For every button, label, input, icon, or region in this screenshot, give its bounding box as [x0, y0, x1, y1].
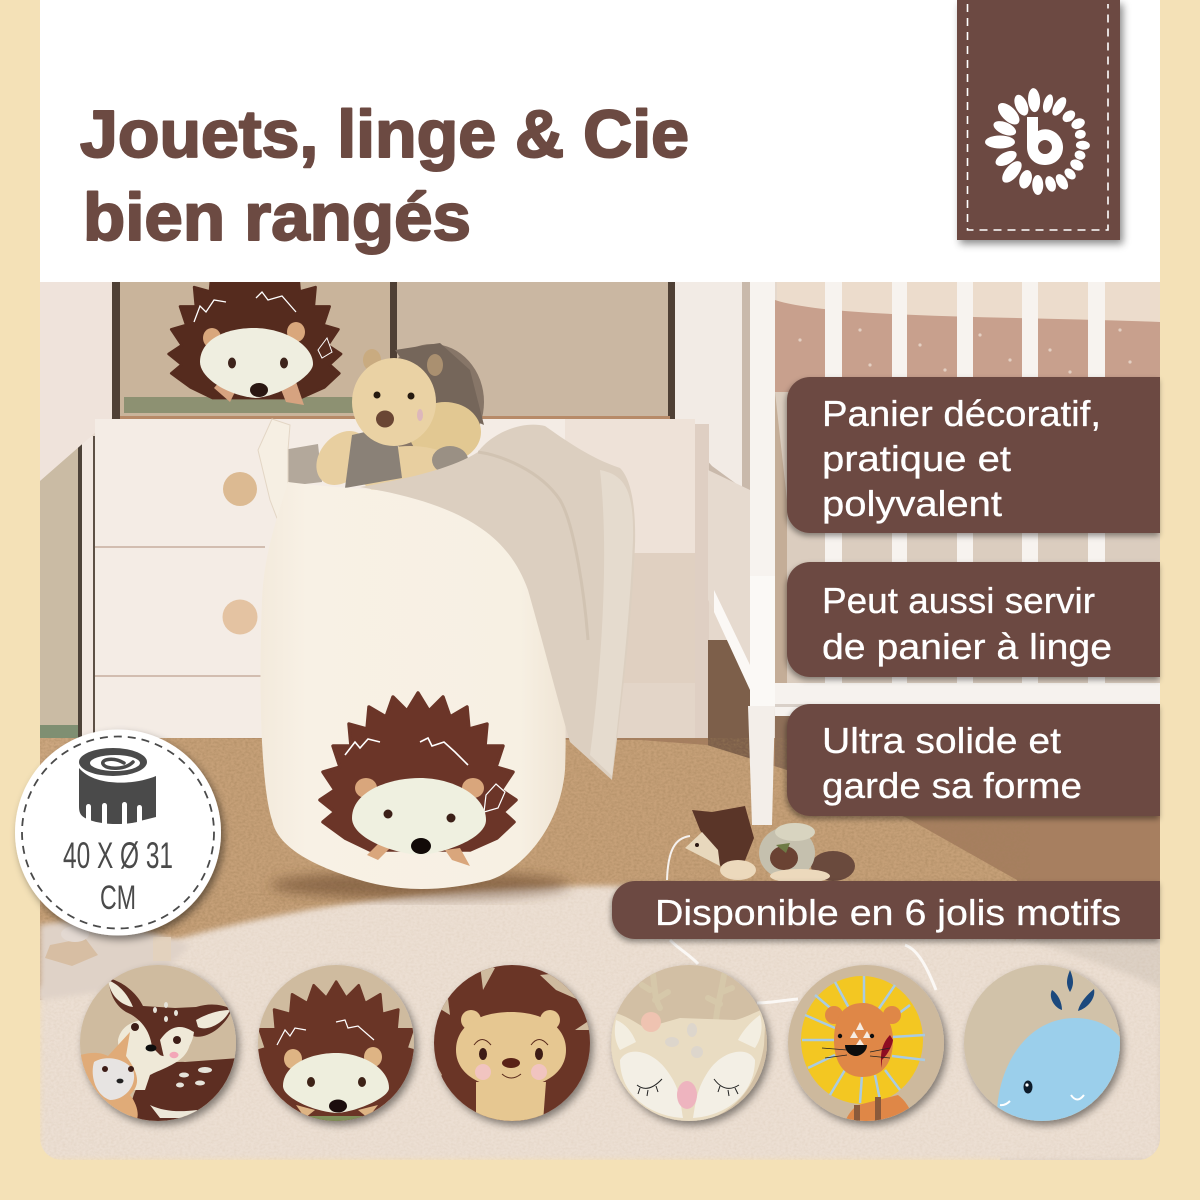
wooden toys lower left: [45, 926, 171, 966]
pattern circle: bear-faced hedgehog: [434, 965, 590, 1122]
wooden pull-along hedgehog toy: [667, 806, 855, 883]
gap behind right door: [709, 282, 750, 490]
feature panel: décoratif: pratique et: [822, 438, 1011, 479]
drawer knob: [222, 600, 258, 634]
feature panel: panier à linge: [787, 562, 1160, 677]
cream fabric basket: [260, 482, 566, 889]
size badge: [15, 730, 221, 936]
crib bedding: [775, 282, 1160, 690]
basket shadow: [270, 871, 570, 899]
size badge: CM: [100, 879, 136, 917]
feature panel: décoratif: polyvalent: [822, 483, 1002, 524]
crib rail: [775, 683, 1160, 716]
wood floor: [40, 640, 1160, 905]
title: bien rangés: [83, 180, 471, 255]
pattern circle: deer and fawn: [80, 965, 240, 1125]
felt hedgehog on basket: [320, 693, 516, 866]
feature panel: ultra solide: [787, 704, 1160, 816]
pattern circle: whale: [964, 965, 1122, 1122]
photo scene: [40, 260, 1160, 1160]
brand tag with logo: [957, 0, 1120, 240]
feature panel: panier à linge: Peut aussi servir: [822, 580, 1095, 621]
white header band: [40, 0, 1160, 283]
feature panel: ultra solide: Ultra solide et: [822, 720, 1061, 761]
feature panel: ultra solide: garde sa forme: [822, 765, 1082, 806]
muslin blanket: [360, 425, 635, 780]
white chest of drawers: [95, 419, 709, 744]
pattern circle: fawn face: [611, 965, 767, 1122]
title: [80, 97, 689, 255]
left linen storage box: [40, 436, 95, 740]
crib bars: [825, 282, 1105, 692]
pattern circle: lion: [788, 965, 944, 1125]
left cabinet door: [40, 282, 112, 481]
feature panel: panier à linge: de panier à linge: [822, 626, 1112, 667]
feature panel: décoratif: Panier décoratif,: [822, 393, 1101, 434]
size badge: 40 X Ø 31: [63, 835, 173, 876]
drawer knob: [223, 472, 257, 506]
title: Jouets, linge & Cie: [80, 97, 689, 172]
icon: bohemian flower logo: [985, 88, 1090, 195]
crib side panel: [708, 470, 750, 680]
pattern circle: hedgehog: [248, 965, 424, 1123]
right cabinet door: [675, 282, 742, 488]
feature panel: décoratif: [787, 377, 1160, 533]
banner: six motifs: Disponible en 6 jolis motifs: [655, 892, 1121, 933]
plush hedgehog: [283, 343, 484, 498]
jute rug: [40, 738, 1030, 1000]
crib post: [748, 282, 775, 825]
icon: measuring tape: [79, 748, 156, 828]
white pull strings: [670, 940, 936, 1003]
basket handle: [258, 418, 290, 518]
furniture backdrop: [92, 282, 777, 738]
round cream rug: [40, 885, 1160, 1160]
storage cubby with hedgehog box: [112, 282, 675, 419]
banner: six motifs: [612, 881, 1160, 939]
